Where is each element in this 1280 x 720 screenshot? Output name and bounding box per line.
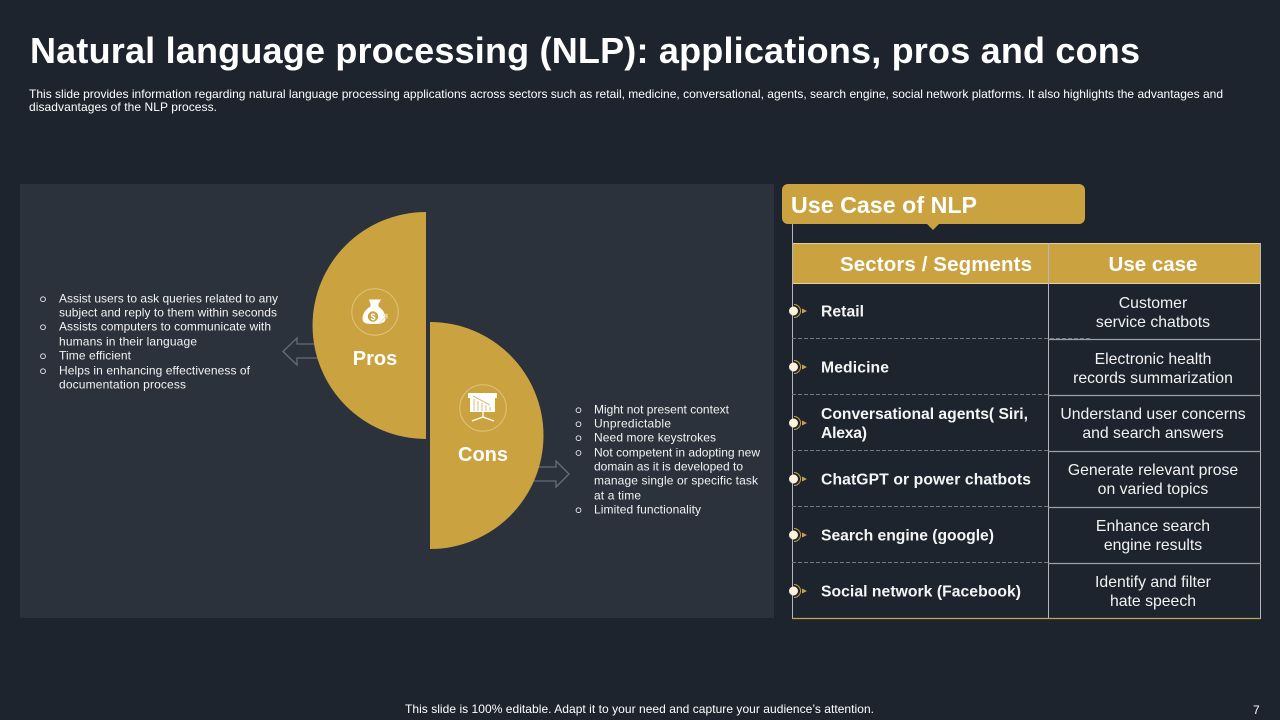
row: retail: Customer [1119, 295, 1187, 312]
table grid [792, 224, 1261, 619]
row: retail: Retail [821, 304, 864, 320]
text block: cons list: Not competent in adopting new [594, 446, 760, 460]
row: conversational agents: Understand user concerns [1060, 406, 1246, 423]
semicircle: pros [313, 212, 426, 439]
row: search engine: Search engine (google) [821, 528, 994, 544]
row: chatgpt: ChatGPT or power chatbots [821, 472, 1031, 488]
icon: money bag [352, 289, 398, 335]
row: search engine [789, 518, 1210, 554]
row: social network: Identify and filter [1095, 574, 1211, 591]
row: chatgpt: on varied topics [1098, 481, 1208, 498]
text block: pros list: Assist users to ask queries related to any [59, 292, 278, 306]
callout: use case of NLP: Use Case of NLP [791, 192, 977, 218]
description [29, 87, 1223, 114]
description: This slide provides information regarding natural language processing applications across sectors such as retail, medicine, conversational, agents, search engine, social network platforms. It also highlights the advantages and [29, 87, 1223, 101]
row: social network: Social network (Facebook) [821, 584, 1021, 600]
text block: pros list: Assists computers to communicate with [59, 320, 271, 334]
text block: cons list: Might not present context [594, 402, 730, 416]
table header [792, 243, 1261, 284]
row: conversational agents: Alexa) [821, 425, 867, 442]
label: pros: Pros [353, 348, 397, 370]
row: medicine [789, 351, 1233, 387]
row: retail: service chatbots [1096, 314, 1210, 331]
page number: 7 [1253, 703, 1260, 717]
text block: pros list: humans in their language [59, 334, 197, 348]
row: retail [789, 295, 1210, 331]
row: conversational agents: Conversational agents( Siri, [821, 406, 1028, 423]
text block: cons list [576, 402, 760, 516]
text block: cons list: Need more keystrokes [594, 430, 716, 444]
panel: use case table [782, 184, 1261, 619]
row: search engine: Enhance search [1096, 518, 1210, 535]
text block: pros list: Helps in enhancing effectiveness of [59, 364, 251, 378]
text block: cons list: Unpredictable [594, 416, 671, 430]
row: medicine: Electronic health [1095, 351, 1211, 368]
arrow: pros [283, 338, 320, 365]
table header: Use case [1109, 253, 1197, 276]
footer note: This slide is 100% editable. Adapt it to your need and capture your audience’s attention. [405, 702, 874, 716]
row: conversational agents [789, 406, 1246, 442]
icon: presentation board [460, 385, 506, 431]
text block: cons list: at a time [594, 488, 641, 502]
callout: use case of NLP [782, 184, 1085, 230]
text block: cons list: manage single or specific task [594, 474, 759, 488]
arrow: cons [530, 461, 569, 487]
text block: pros list: Time efficient [59, 348, 132, 362]
text block: cons list: domain as it is developed to [594, 460, 743, 474]
row: search engine: engine results [1104, 537, 1202, 554]
description: disadvantages of the NLP process. [29, 100, 217, 114]
label: cons: Cons [458, 444, 508, 466]
row: chatgpt: Generate relevant prose [1068, 462, 1238, 479]
table header: Sectors / Segments [840, 253, 1032, 276]
row: social network [789, 574, 1211, 610]
row: medicine: Medicine [821, 360, 889, 376]
semicircle: cons [430, 322, 544, 549]
row: chatgpt [789, 462, 1238, 498]
row: conversational agents: and search answers [1082, 425, 1224, 442]
text block: cons list: Limited functionality [594, 502, 701, 516]
text block: pros list [41, 292, 278, 392]
row: social network: hate speech [1110, 593, 1196, 610]
text block: pros list: subject and reply to them within seconds [59, 306, 277, 320]
title: Natural language processing (NLP): applications, pros and cons [30, 30, 1140, 71]
icon: money bag: $ [370, 312, 376, 322]
row: medicine: records summarization [1073, 370, 1233, 387]
text block: pros list: documentation process [59, 378, 186, 392]
panel: pros and cons [20, 184, 774, 618]
panel background [20, 184, 774, 618]
